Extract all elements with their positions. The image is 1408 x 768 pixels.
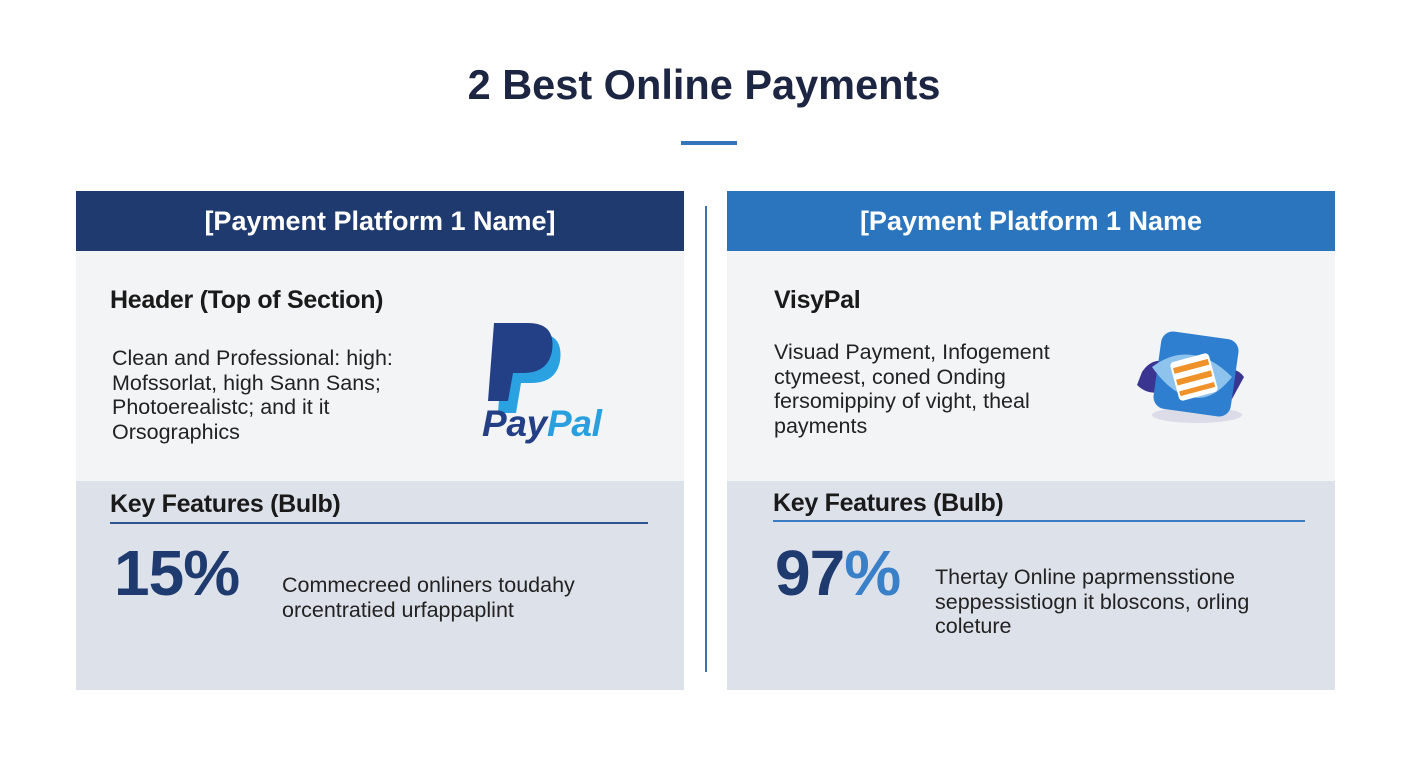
stat: 15%: 15% (114, 537, 239, 609)
description text: payments (774, 414, 867, 438)
rule (773, 520, 1305, 522)
panel header 2: [Payment Platform 1 Name (860, 206, 1202, 236)
stat description (935, 565, 1249, 638)
rule (110, 522, 648, 524)
icon: payment app (1137, 332, 1244, 423)
description text: Mofssorlat, high Sann Sans; (112, 370, 381, 394)
panel: platform 1 (76, 191, 684, 690)
stat description: Commecreed onliners toudahy (282, 573, 575, 597)
lower section background (727, 481, 1335, 690)
description text (774, 340, 1050, 438)
description text: Orsographics (112, 420, 240, 444)
title underline (681, 141, 737, 145)
subheading: VisyPal (774, 286, 860, 314)
icon: PayPal logo: PayPal (482, 403, 602, 444)
description text: fersomippiny of vight, theal (774, 389, 1030, 413)
subheading: Header (Top of Section) (110, 286, 383, 314)
description text: ctymeest, coned Onding (774, 364, 1006, 388)
description text: Visuad Payment, Infogement (774, 340, 1050, 364)
description text (112, 346, 393, 444)
stat description (282, 573, 575, 622)
panel header 1: [Payment Platform 1 Name] (204, 206, 556, 236)
stat description: seppessistiogn it bloscons, orling (935, 590, 1249, 614)
stat: 97%: 97% (775, 537, 900, 609)
panel header 2 (727, 191, 1335, 251)
stat description: Thertay Online paprmensstione (935, 565, 1235, 589)
icon: PayPal logo (482, 323, 602, 444)
title: 2 Best Online Payments (468, 61, 940, 108)
key features heading: Key Features (Bulb) (773, 489, 1003, 517)
lower section background (76, 481, 684, 690)
key features heading: Key Features (Bulb) (110, 490, 340, 518)
stat description: coleture (935, 614, 1012, 638)
vertical divider (705, 206, 707, 672)
panel: platform 2 (727, 191, 1335, 690)
description text: Photoerealistc; and it it (112, 395, 330, 419)
panel header 1 (76, 191, 684, 251)
stat description: orcentratied urfappaplint (282, 598, 514, 622)
description text: Clean and Professional: high: (112, 346, 393, 370)
